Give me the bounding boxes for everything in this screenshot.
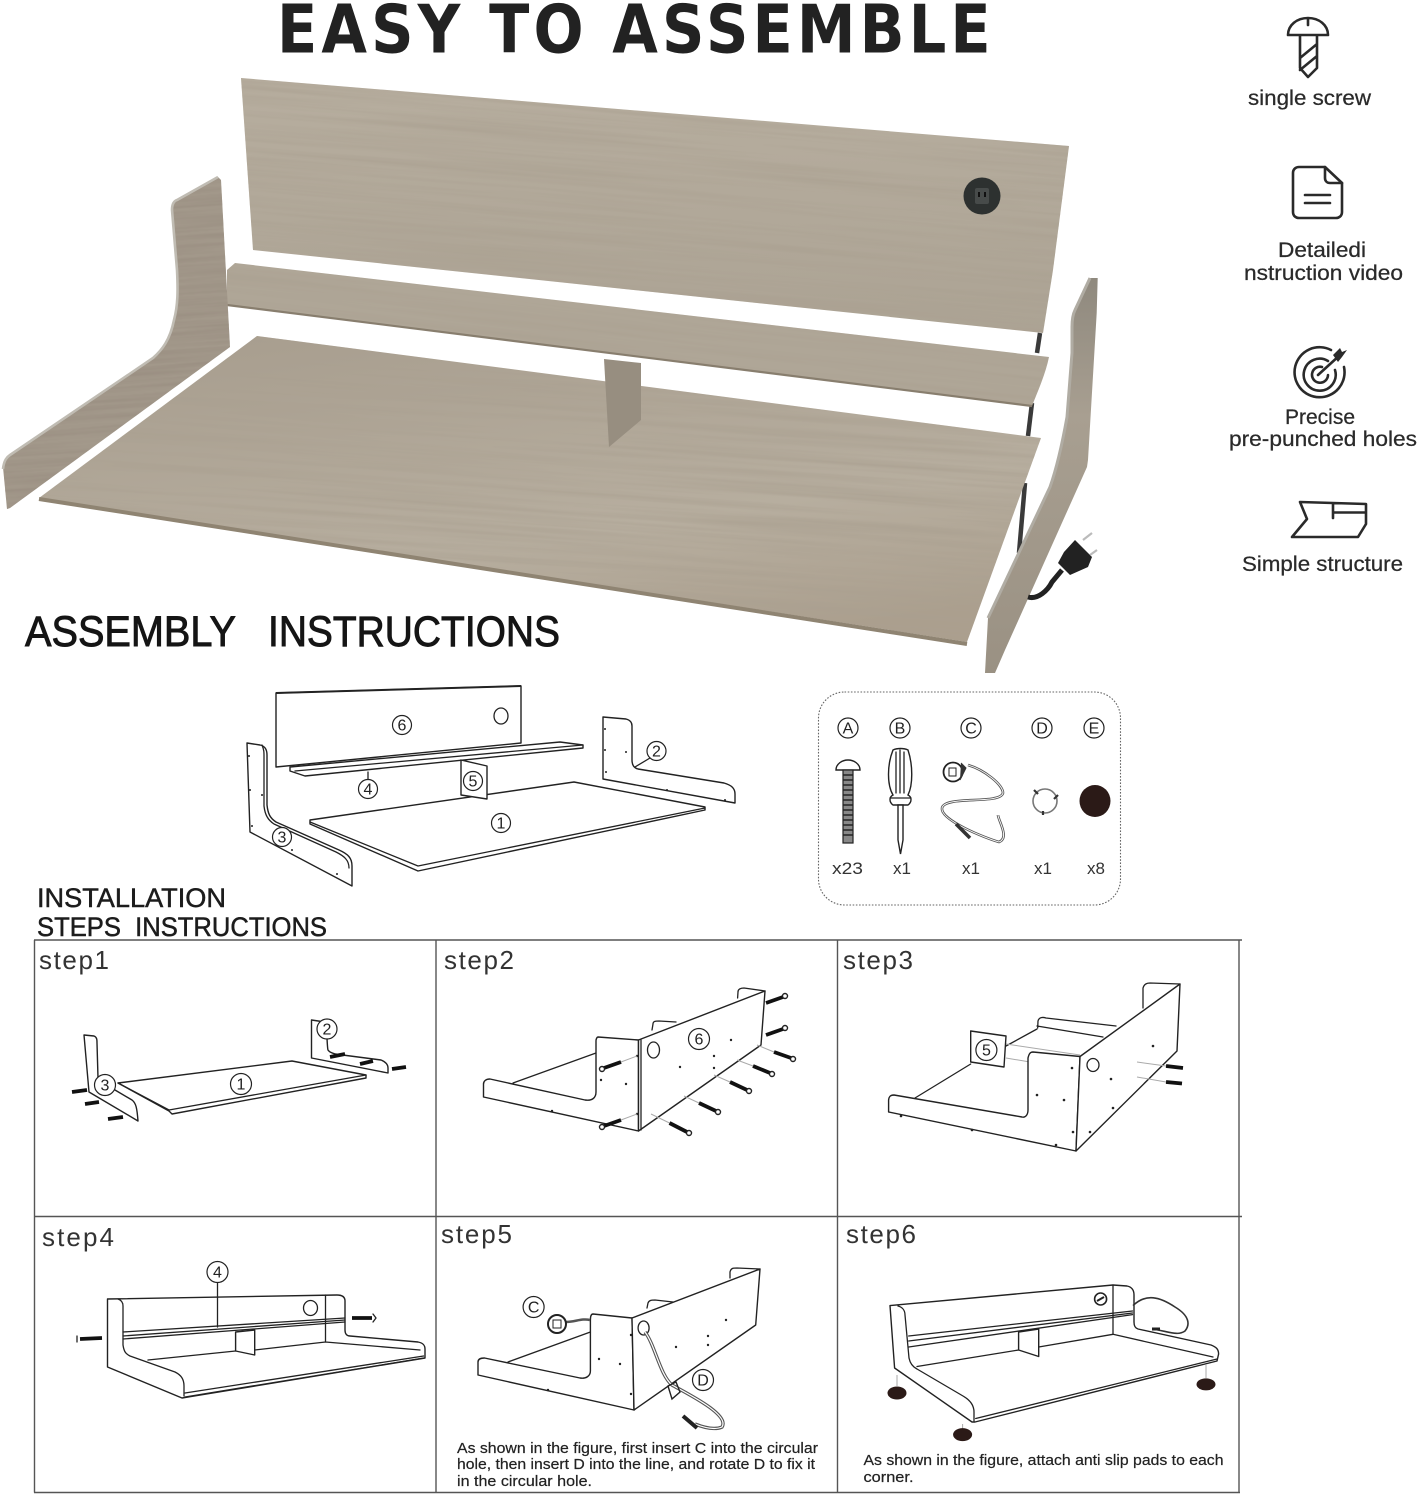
icon: screw A [836, 760, 860, 843]
label: detailed instruction video [1244, 239, 1403, 285]
assembled desk back view: 6 [695, 1032, 704, 1048]
screws [80, 1318, 372, 1339]
part letters: C [965, 720, 977, 738]
label: detailed instruction video: nstruction video [1244, 262, 1403, 285]
icon: power outlet [964, 178, 1000, 214]
panel: step 2 [444, 945, 796, 1136]
part 1 desktop: 1 [497, 816, 506, 832]
note text: As shown in the figure, attach anti slip pads to each [864, 1453, 1224, 1469]
part 4 shelf: 4 [364, 782, 373, 798]
panel: shelf [227, 263, 1049, 408]
part 2 right side [603, 717, 735, 803]
diagram: exploded parts [247, 686, 735, 886]
anti-slip pads [888, 1378, 1216, 1441]
step label: step2 [444, 945, 514, 975]
right side part: 2 [323, 1022, 332, 1038]
icon: anti-slip pad E [1080, 785, 1110, 817]
screws [1166, 1066, 1183, 1084]
part 6 back panel: 6 [398, 718, 407, 734]
dark support posts [1019, 333, 1040, 553]
part letters: A [843, 720, 854, 738]
icon: ring D [1033, 789, 1058, 815]
quantities [832, 859, 1105, 878]
part 3 left side [247, 743, 352, 886]
label: precise pre-punched holes [1229, 406, 1417, 451]
heading: installation steps instructions: INSTALLATION [37, 883, 226, 913]
step label: step4 [42, 1222, 114, 1252]
heading: installation steps instructions: STEPS INSTRUCTIONS [37, 912, 327, 942]
product photo: disassembled desk parts [2, 78, 1098, 673]
label: precise pre-punched holes: Precise [1285, 406, 1355, 429]
note text: As shown in the figure, first insert C into the circular [457, 1441, 818, 1457]
left side part [84, 1035, 138, 1121]
quantities: x8 [1087, 859, 1105, 878]
panel: divider [604, 359, 641, 447]
heading: assembly instructions: ASSEMBLY [25, 609, 236, 656]
screws [72, 1054, 406, 1119]
part 6 back panel [276, 686, 521, 767]
part letters [838, 718, 1104, 738]
label: precise pre-punched holes: pre-punched holes [1229, 428, 1417, 451]
part 4 shelf [290, 742, 583, 798]
assembled desk front view: 4 [213, 1264, 222, 1282]
panel: left side board [2, 176, 230, 509]
assembled desk front view [108, 1262, 425, 1398]
icon: cable C [942, 762, 1004, 842]
assembled desk back view [484, 988, 765, 1131]
icon: document [1293, 167, 1342, 218]
heading: assembly instructions [25, 609, 560, 656]
part 1 desktop [310, 782, 705, 871]
assembled desk with divider [889, 983, 1180, 1151]
icon: target [1295, 347, 1347, 397]
label: single screw: single screw [1248, 87, 1372, 110]
icon: power plug and cable [1028, 533, 1097, 598]
heading: assembly instructions: INSTRUCTIONS [268, 609, 560, 656]
quantities: x23 [832, 859, 863, 878]
desktop part: 1 [237, 1076, 246, 1094]
note text [457, 1441, 818, 1490]
screws [621, 1045, 774, 1123]
part letters: E [1089, 720, 1099, 738]
desktop part [118, 1061, 366, 1114]
part letters: B [895, 720, 905, 738]
step label: step3 [843, 945, 913, 975]
icon: screwdriver B [888, 748, 912, 854]
quantities: x1 [1034, 859, 1052, 878]
note text: hole, then insert D into the line, and rotate D to fix it [457, 1457, 815, 1473]
part letters: D [1036, 720, 1048, 738]
label: detailed instruction video: Detailedi [1278, 239, 1366, 262]
icon: single screw [1288, 18, 1328, 77]
cable C and lock ring D: C [528, 1300, 539, 1316]
step label: step5 [441, 1219, 512, 1249]
note text [864, 1453, 1224, 1486]
part 5 divider: 5 [469, 774, 478, 790]
part 2 right side: 2 [652, 744, 661, 760]
cable C and lock ring D: D [697, 1372, 709, 1390]
note text: corner. [864, 1470, 914, 1486]
panel: desktop [38, 336, 1041, 646]
panel: hardware list [818, 692, 1120, 905]
quantities: x1 [893, 859, 911, 878]
assembled desk rear view with cable [478, 1268, 760, 1410]
quantities: x1 [962, 859, 980, 878]
panel: step 1 [39, 945, 406, 1121]
part 5 divider [461, 760, 487, 799]
panel: step 5 [441, 1219, 818, 1490]
panel: step 3 [843, 945, 1183, 1151]
note text: in the circular hole. [457, 1474, 592, 1490]
label: simple structure: Simple structure [1242, 553, 1403, 576]
step label: step1 [39, 945, 109, 975]
panel: step 4 [42, 1222, 425, 1398]
steps grid [34, 940, 1242, 1492]
panel: right side board [985, 278, 1098, 673]
panel: back board [241, 78, 1069, 333]
assembled desk with divider: 5 [982, 1042, 991, 1060]
right side part [312, 1019, 388, 1073]
panel: step 6 [846, 1219, 1224, 1486]
left side part: 3 [101, 1078, 110, 1094]
icon: simple structure [1292, 502, 1366, 537]
step label: step6 [846, 1219, 916, 1249]
heading: installation steps instructions [37, 883, 327, 942]
cable C and lock ring D [523, 1296, 723, 1428]
assembled desk with pads [890, 1285, 1219, 1429]
part 3 left side: 3 [278, 830, 287, 846]
